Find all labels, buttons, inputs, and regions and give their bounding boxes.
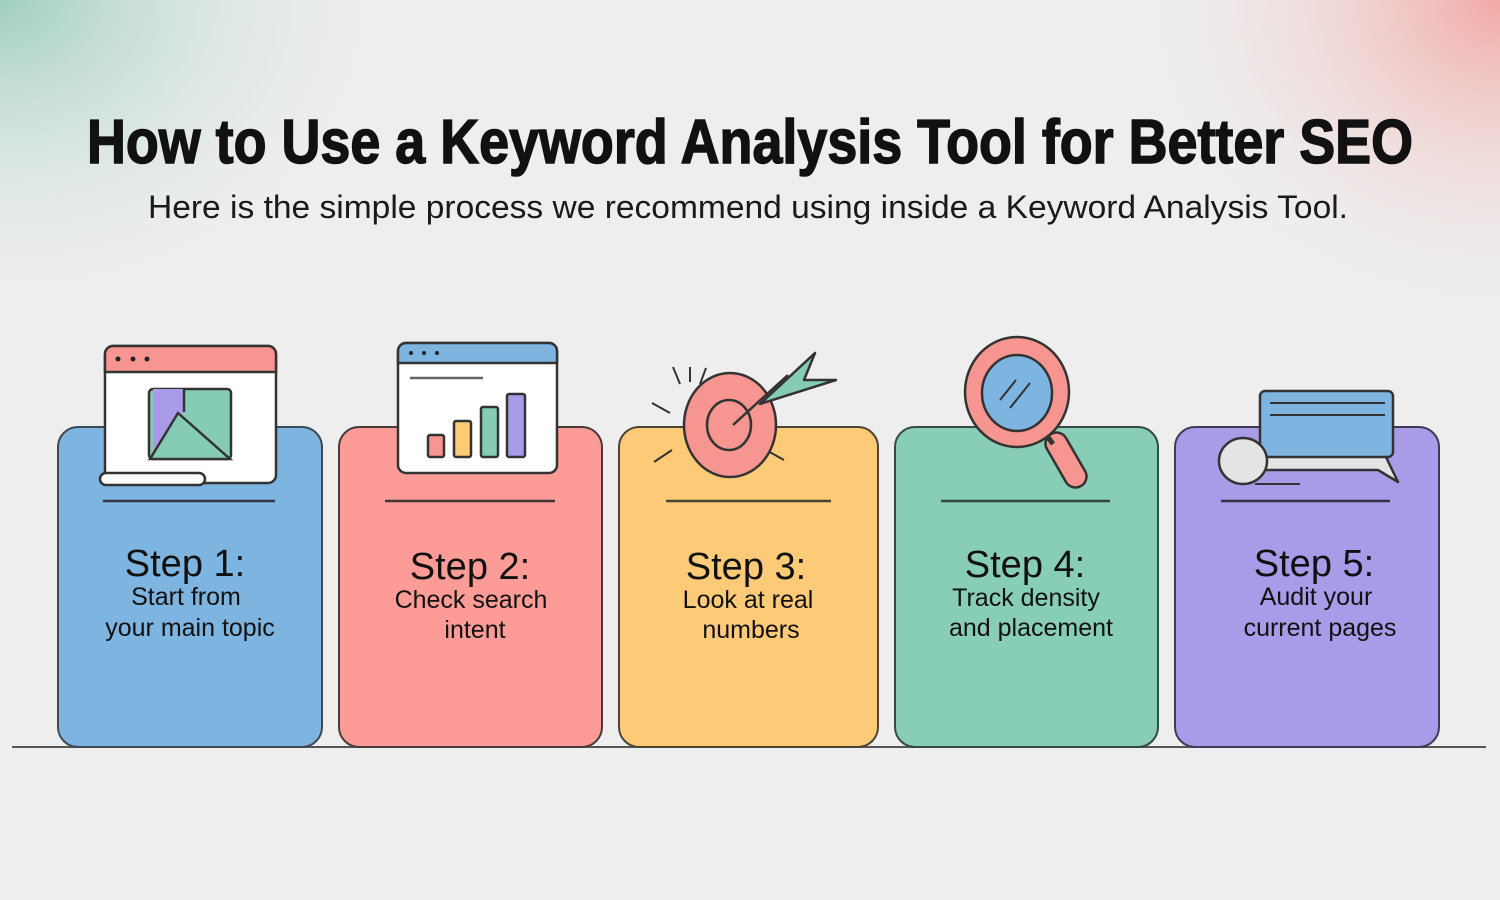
card: step 4: Track density: [952, 584, 1100, 612]
icon: browser with bar chart: [398, 343, 557, 473]
card: step 4: [895, 337, 1158, 747]
icon: browser with chart: [100, 346, 276, 485]
subtitle: Here is the simple process we recommend using inside a Keyword Analysis Tool.: [148, 189, 1348, 225]
text: step 2: Step 2:: [410, 546, 530, 588]
text: step 1: Step 1:: [125, 543, 245, 585]
text: step 4: Step 4:: [965, 544, 1085, 586]
icon: chat bubbles: [1219, 391, 1398, 484]
card: step 2: [339, 343, 602, 747]
icon: target with arrow: [652, 367, 784, 462]
card: step 2: Check search: [395, 586, 547, 614]
card: step 1: your main topic: [105, 614, 275, 642]
card: step 1: Start from: [131, 583, 241, 611]
card: step 5: current pages: [1244, 614, 1396, 642]
card: step 5: Audit your: [1260, 583, 1372, 611]
text: step 3: Step 3:: [686, 546, 806, 588]
card: step 1: [58, 346, 322, 747]
card: step 3: Look at real: [683, 586, 813, 614]
icon: magnifier: [965, 337, 1091, 491]
card: step 2: intent: [444, 616, 506, 644]
card: step 3: numbers: [702, 616, 800, 644]
card: step 4: and placement: [949, 614, 1113, 642]
text: step 5: Step 5:: [1254, 543, 1374, 585]
baseline: [12, 746, 1486, 748]
card: step 3: [619, 353, 878, 747]
card: step 5: [1175, 391, 1439, 747]
